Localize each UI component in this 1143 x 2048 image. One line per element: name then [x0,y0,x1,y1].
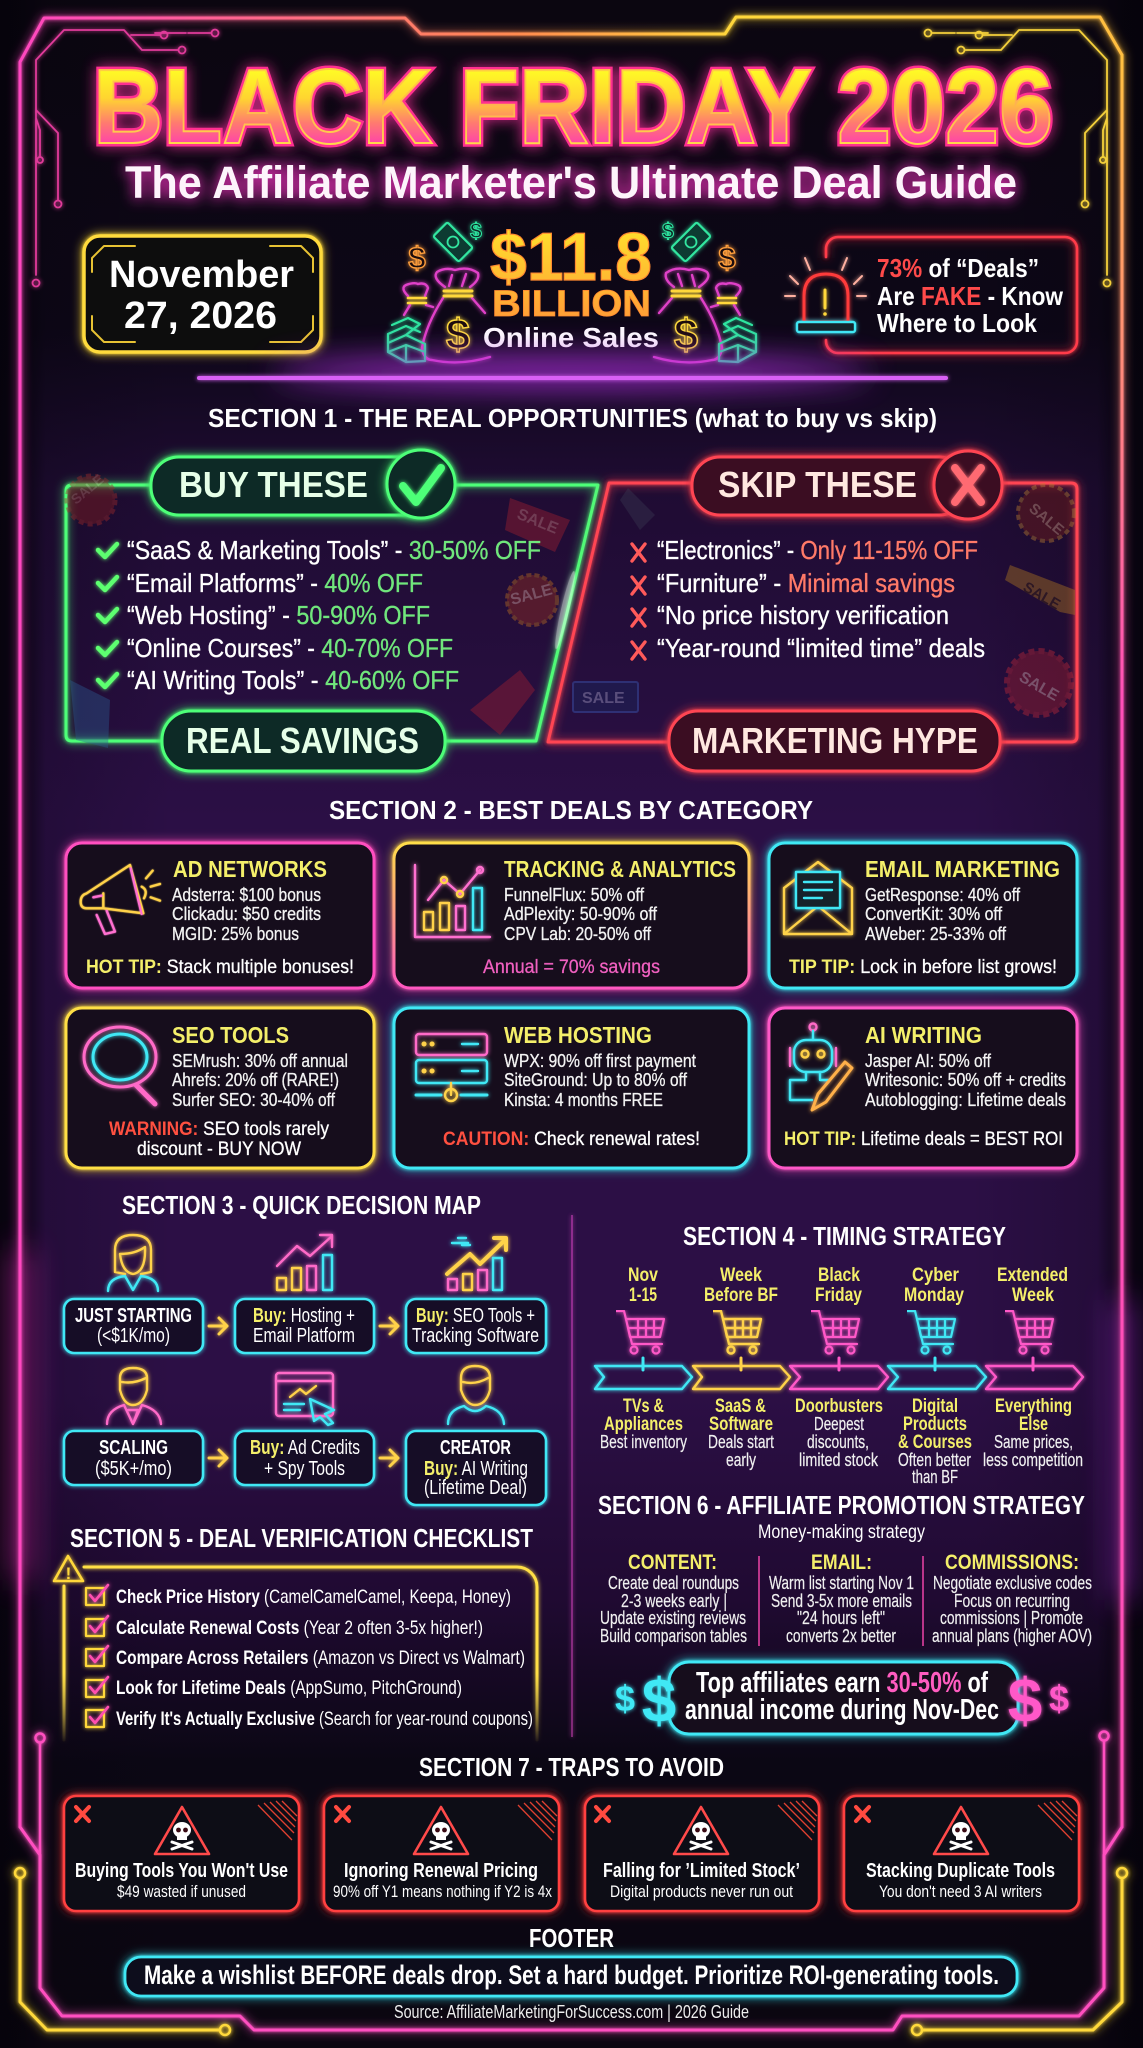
circuit lines top left [32,30,218,286]
vertical divider between columns [571,1215,573,1737]
icon: skull warning [414,1807,468,1854]
column: extended week: Else [1019,1414,1048,1435]
column: extended week [983,1265,1083,1470]
column: extended week: Week [1012,1285,1054,1306]
trap card 1 [64,1796,299,1911]
icon: siren [785,258,866,332]
box: scaling: SCALING [99,1437,168,1459]
column: email: Send 3-5x more emails [771,1591,912,1611]
card: web hosting [394,1008,749,1168]
glowing divider [197,356,948,388]
title: BLACK FRIDAY 2026 [93,48,1053,166]
seo text: WARNING: SEO tools rarely [109,1118,329,1140]
column: extended week: less competition [983,1450,1083,1470]
skip list: “Electronics” - Only 11-15% OFF [657,535,978,565]
column: content: Update existing reviews [600,1608,746,1628]
box: hosting and email: Buy: Hosting + [253,1305,355,1327]
source line: Source: AffiliateMarketingForSuccess.com | 2026 Guide [394,2002,749,2022]
ai writing text: Jasper AI: 50% off [865,1051,992,1071]
box: just starting [64,1299,203,1353]
column: cyber monday: Digital [912,1396,958,1417]
icon: megaphone [81,865,160,934]
ad networks text: Adsterra: $100 bonus [172,885,321,905]
icon: chart one [277,1235,332,1290]
column: content: CONTENT: [628,1551,717,1574]
column: nov 1-15: 1-15 [629,1285,657,1306]
column: extended week: Same prices, [994,1432,1073,1452]
icon: money bags and cash, left: $ [408,240,426,275]
icon: red x [934,451,1002,519]
box: creator: CREATOR [440,1437,511,1459]
trap card 4: You don't need 3 AI writers [879,1882,1042,1901]
box: ad credits: + Spy Tools [264,1458,345,1480]
alert text [877,253,1064,338]
icon: robot with pen [790,1024,852,1110]
arrow [380,1318,398,1334]
icon: money bags and cash, left: $ [446,311,470,359]
column: nov 1-15: Nov [628,1265,658,1286]
hosting text: SiteGround: Up to 80% off [504,1070,688,1090]
alert text: 73% of “Deals” [877,253,1039,283]
box: scaling: ($5K+/mo) [95,1458,172,1480]
date badge [84,236,321,352]
marketing hype pill [669,711,1000,771]
column: cyber monday: Monday [904,1285,964,1306]
column: week before bf: early [726,1450,756,1470]
checklist text: Look for Lifetime Deals (AppSumo, PitchGround) [116,1677,462,1699]
icon: envelope [784,862,852,934]
circuit lines top right [924,30,1110,286]
box: scaling [64,1431,203,1485]
subtitle: The Affiliate Marketer's Ultimate Deal Guide [125,157,1017,208]
card: tracking and analytics [394,843,749,988]
email text: GetResponse: 40% off [865,885,1021,905]
decorative sale stamps, skip: SALE [1016,669,1062,705]
column: black friday: limited stock [799,1450,879,1470]
section 5 heading: SECTION 5 - DEAL VERIFICATION CHECKLIST [70,1523,533,1553]
column: commissions: Negotiate exclusive codes [933,1573,1092,1593]
icon: money bags and cash, right: $ [718,240,736,275]
box: just starting: JUST STARTING [75,1305,192,1327]
checklist text [116,1586,533,1730]
column: email: converts 2x better [786,1626,896,1646]
email text: ConvertKit: 30% off [865,904,1003,924]
seo text: Surfer SEO: 30-40% off [172,1090,336,1110]
icon: money bags and cash, right: $ [674,311,698,359]
icon: skull warning [155,1807,209,1854]
skip list: “Furniture” - Minimal savings [657,568,955,598]
skip these pill [692,457,967,515]
decision map [64,1235,546,1505]
decorative sale stamps, buy: SALE [509,581,555,609]
checkboxes [86,1585,108,1727]
date text [109,254,294,337]
icon: money bags and cash, left [388,220,490,362]
alert box [785,237,1077,353]
box: creator: (Lifetime Deal) [424,1477,527,1499]
column: cyber monday [888,1265,986,1487]
ai writing text: AI WRITING [865,1022,982,1048]
column: commissions: commissions | Promote [940,1608,1083,1628]
ai writing text: HOT TIP: Lifetime deals = BEST ROI [784,1128,1063,1150]
column: week before bf [693,1265,790,1470]
magenta edge glows [14,1250,1130,1600]
checklist text: Check Price History (CamelCamelCamel, Keepa, Honey) [116,1586,511,1608]
column: week before bf: SaaS & [715,1396,766,1417]
column: nov 1-15: Appliances [604,1414,683,1435]
icon: money bags and cash, right: $ [662,220,674,243]
section 1 heading: SECTION 1 - THE REAL OPPORTUNITIES (what to buy vs skip) [208,403,937,433]
icon: money bags and cash, right [654,220,756,362]
callout: top affiliates: Top affiliates earn 30-50% of [696,1667,988,1699]
icon: creator person [448,1366,504,1424]
trap card 3 [585,1796,819,1911]
panel: verification checklist [54,1556,537,1740]
card: email marketing [769,843,1077,988]
icon: man in suit [107,1368,161,1424]
box: hosting and email: Email Platform [253,1325,355,1347]
hosting text: Kinsta: 4 months FREE [504,1090,663,1110]
flash between panels [552,570,578,650]
section 3 heading: SECTION 3 - QUICK DECISION MAP [122,1190,481,1220]
icon: pink dollars: $ [1049,1678,1069,1719]
column: commissions: COMMISSIONS: [945,1551,1079,1574]
card: seo tools [66,1008,374,1168]
real savings pill: REAL SAVINGS [186,720,419,761]
icon: skull warning [674,1807,728,1854]
hosting text: CAUTION: Check renewal rates! [443,1128,700,1150]
callout: top affiliates [615,1662,1069,1736]
buy list: “Web Hosting” - 50-90% OFF [127,600,430,630]
sales figure: Online Sales [483,322,659,353]
skip these pill: SKIP THESE [718,464,917,505]
checklist text: Compare Across Retailers (Amazon vs Direct vs Walmart) [116,1647,525,1669]
tracking text [483,856,736,978]
tracking text: TRACKING & ANALYTICS [504,856,736,882]
column: nov 1-15: Best inventory [600,1432,687,1452]
column: extended week: Everything [995,1396,1072,1417]
box: seo and tracking: Tracking Software [412,1325,539,1347]
trap card 4 [844,1796,1079,1911]
icon: skull warning [934,1807,988,1854]
column: black friday: discounts, [807,1432,869,1452]
column: black friday: Doorbusters [795,1396,883,1417]
hosting text: WEB HOSTING [504,1022,652,1048]
icon: bar chart [415,865,490,937]
buy list [98,535,541,695]
box: ad credits [235,1431,374,1485]
date text: November [109,254,294,296]
arrow [209,1450,227,1466]
icon: warning triangle [54,1556,83,1583]
trap card 2: 90% off Y1 means nothing if Y2 is 4x [333,1882,552,1901]
tracking text: AdPlexity: 50-90% off [504,904,658,924]
column: email [769,1551,914,1646]
ad networks text: Clickadu: $50 credits [172,904,321,924]
box: seo and tracking: Buy: SEO Tools + [416,1305,535,1327]
column: content: Create deal roundups [608,1573,739,1593]
column: extended week: Extended [997,1265,1068,1286]
column: week before bf: Software [709,1414,773,1435]
alert text: Where to Look [877,308,1037,338]
column: week before bf: Deals start [708,1432,774,1452]
decorative sale stamps, skip: SALE [1025,500,1067,539]
seo text: SEO TOOLS [172,1022,289,1048]
decorative sale stamps, skip [573,485,1075,715]
skip list [632,535,985,663]
icon: cyan dollars: $ [615,1678,635,1719]
column: nov 1-15: TVs & [623,1396,664,1417]
icon: pink dollars [1008,1667,1069,1736]
panel: buy these [66,450,598,771]
skip list: “No price history verification [657,600,949,630]
buy these pill: BUY THESE [179,464,368,505]
buy list: “SaaS & Marketing Tools” - 30-50% OFF [127,535,541,565]
column: content: 2-3 weeks early | [621,1591,727,1611]
seo text: Ahrefs: 20% off (RARE!) [172,1070,339,1090]
column: black friday: Deepest [814,1414,864,1434]
checklist text: Calculate Renewal Costs (Year 2 often 3-5x higher!) [116,1617,483,1639]
icon: cyan dollars: $ [642,1667,676,1736]
title: BLACK FRIDAY 2026 [93,48,1053,166]
icon: browser window [276,1373,334,1425]
column: cyber monday: Cyber [912,1265,960,1286]
box: creator [406,1431,546,1505]
trap card 1: $49 wasted if unused [117,1882,246,1901]
callout: top affiliates: annual income during Nov-Dec [685,1694,999,1726]
icon: pink dollars: $ [1008,1667,1042,1736]
column: commissions [932,1551,1092,1646]
decorative sale stamps, skip: SALE [582,690,625,707]
column: email: "24 hours left" [797,1608,885,1628]
email text: EMAIL MARKETING [865,856,1060,882]
icon: magnifier [84,1027,156,1104]
icon: chart two [447,1238,506,1290]
section 6 subheading: Money-making strategy [758,1522,925,1543]
tracking text: CPV Lab: 20-50% off [504,924,652,944]
icon: woman [108,1235,158,1291]
ai writing text: Autoblogging: Lifetime deals [865,1090,1066,1110]
sales figure [483,219,659,353]
hosting text: WPX: 90% off first payment [504,1051,696,1071]
seo text [109,1022,348,1160]
box: hosting and email [235,1299,374,1353]
promotion strategy columns [600,1551,1092,1646]
title: BLACK FRIDAY 2026 [93,48,1053,166]
email text: TIP TIP: Lock in before list grows! [789,956,1057,978]
buy list: “Online Courses” - 40-70% OFF [127,633,453,663]
ad networks text: MGID: 25% bonus [172,924,299,944]
decorative sale stamps, buy: SALE [68,471,107,507]
icon: green check [387,450,455,518]
trap card 3: Falling for ’Limited Stock’ [603,1860,800,1882]
footer callout [125,1957,1017,1996]
column: week before bf: Week [720,1265,762,1286]
column: cyber monday: Often better [898,1450,971,1470]
ai writing text: Writesonic: 50% off + credits [865,1070,1066,1090]
card: ad networks [66,843,374,988]
tracking text: FunnelFlux: 50% off [504,885,645,905]
column: nov 1-15 [595,1265,692,1452]
icon: money bags and cash, left: $ [470,220,482,243]
sales figure: $11.8 [490,219,652,295]
alert text: Are FAKE - Know [877,281,1064,311]
arrow [380,1450,398,1466]
ad networks text: HOT TIP: Stack multiple bonuses! [86,956,354,978]
decorative sale stamps, skip: SALE [1020,579,1063,613]
trap card 3: Digital products never run out [610,1882,793,1901]
seo text: discount - BUY NOW [137,1138,302,1160]
buy list: “AI Writing Tools” - 40-60% OFF [127,665,459,695]
decorative sale stamps, buy: SALE [515,506,561,538]
column: commissions: Focus on recurring [954,1591,1070,1611]
trap card 1: Buying Tools You Won't Use [75,1860,288,1882]
column: email: EMAIL: [811,1551,872,1574]
buy these pill [151,457,436,515]
email text [789,856,1060,978]
trap card 4: Stacking Duplicate Tools [866,1860,1055,1882]
sales figure: BILLION [492,283,651,324]
buy list: “Email Platforms” - 40% OFF [127,568,423,598]
trap card 2: Ignoring Renewal Pricing [344,1860,538,1882]
seo text: SEMrush: 30% off annual [172,1051,348,1071]
timeline [595,1265,1083,1487]
column: cyber monday: than BF [912,1467,958,1487]
skip list: “Year-round “limited time” deals [657,633,985,663]
column: email: Warm list starting Nov 1 [769,1573,914,1593]
real savings pill [162,711,445,771]
icon: server [416,1034,487,1101]
column: cyber monday: & Courses [898,1432,972,1453]
column: black friday: Friday [815,1285,862,1306]
email text: AWeber: 25-33% off [865,924,1007,944]
column: commissions: annual plans (higher AOV) [932,1626,1092,1646]
marketing hype pill: MARKETING HYPE [692,720,978,761]
icon: warning triangle: ! [66,1564,71,1583]
column: cyber monday: Products [903,1414,967,1435]
panel: skip these [548,451,1077,771]
column: black friday: Black [818,1265,860,1286]
card: ai writing [769,1008,1077,1168]
arrow [209,1318,227,1334]
checklist text: Verify It's Actually Exclusive (Search for year-round coupons) [116,1708,533,1730]
column: black friday [790,1265,888,1470]
section 2 heading: SECTION 2 - BEST DEALS BY CATEGORY [329,795,813,825]
footer heading: FOOTER [529,1923,614,1953]
column: content: Build comparison tables [600,1626,747,1646]
ad networks text: AD NETWORKS [173,856,327,882]
ai writing text [784,1022,1066,1150]
subtitle: The Affiliate Marketer's Ultimate Deal Guide [125,157,1017,208]
icon: cyan dollars [615,1667,676,1736]
section 4 heading: SECTION 4 - TIMING STRATEGY [683,1221,1006,1251]
decorative sale stamps, buy [67,471,570,748]
trap card 2 [324,1796,559,1911]
column: week before bf: Before BF [704,1285,778,1306]
section 7 heading: SECTION 7 - TRAPS TO AVOID [419,1752,724,1782]
date text: 27, 2026 [124,295,277,337]
box: ad credits: Buy: Ad Credits [250,1437,360,1459]
hosting text [443,1022,700,1150]
tracking text: Annual = 70% savings [483,956,660,978]
box: seo and tracking [406,1299,546,1353]
column: content [600,1551,747,1646]
ad networks text [86,856,354,978]
box: creator: Buy: AI Writing [424,1458,528,1480]
box: just starting: (<$1K/mo) [97,1325,170,1347]
